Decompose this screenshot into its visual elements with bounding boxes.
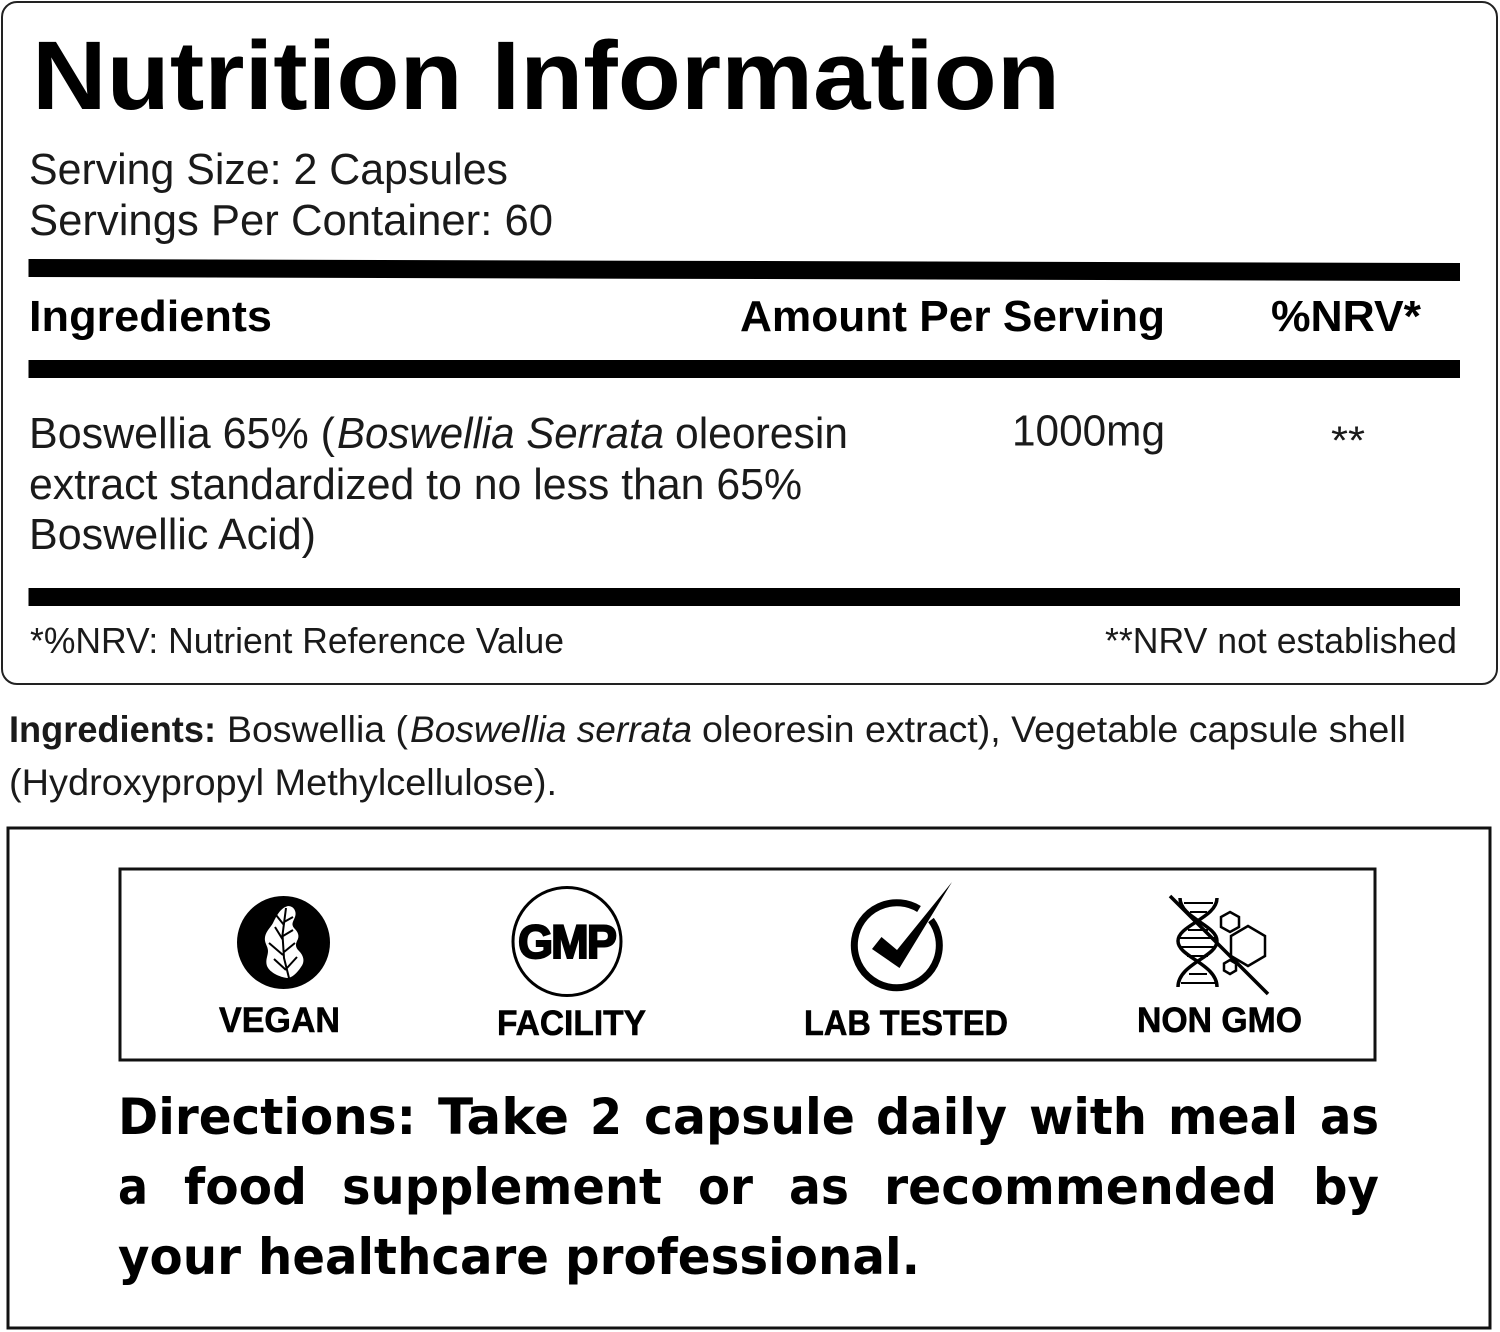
ingredients list: Boswellia ( [227,709,409,750]
ingredients list [9,709,1406,803]
table header: Amount Per Serving [740,292,1165,341]
non gmo label: NON GMO [1137,1001,1302,1040]
directions: capsule [644,1088,855,1146]
directions: as [1320,1088,1379,1146]
table top rule [28,259,1460,281]
ingredients list: (Hydroxypropyl Methylcellulose). [9,762,557,803]
table header: Ingredients [29,292,272,341]
serving information: Servings Per Container: 60 [29,196,553,245]
amount per serving value: 1000mg [1012,406,1165,456]
directions: supplement [342,1158,662,1216]
serving information: Serving Size: 2 Capsules [29,145,508,194]
ingredient description: oleoresin [675,409,848,458]
directions: professional. [565,1228,920,1286]
directions: recommended [884,1158,1277,1216]
directions: healthcare [258,1228,549,1286]
facility label: FACILITY [497,1004,646,1043]
ingredient description: Boswellia Serrata [337,409,664,458]
directions: by [1313,1158,1379,1216]
ingredient description [29,409,848,559]
directions: meal [1168,1088,1298,1146]
icon: gmp badge: GMP [518,915,616,968]
directions: daily [876,1088,1007,1146]
directions: food [184,1158,307,1216]
serving information [29,145,553,245]
table header [29,292,1422,341]
panel: certifications and directions [8,828,1490,1328]
ingredient description: extract standardized to no less than 65% [29,460,802,509]
icon: non gmo dna [1170,896,1268,994]
directions: Directions: [118,1088,416,1146]
ingredient description: Boswellic Acid) [29,510,316,559]
header rule [28,360,1460,378]
ingredients list: oleoresin extract), Vegetable capsule shell [702,709,1406,750]
directions: your [118,1228,241,1286]
directions: Take [438,1088,569,1146]
ingredient description: Boswellia 65% ( [29,409,335,458]
directions: or [698,1158,753,1216]
ingredients list: Ingredients: [9,709,216,750]
footnote: nrv not established: **NRV not established [1105,620,1457,661]
directions: a [118,1158,148,1216]
icon: vegan leaf [237,896,330,989]
ingredients list: Boswellia serrata [410,709,692,750]
directions: 2 [590,1088,622,1146]
panel: certification badges [120,869,1375,1060]
vegan label: VEGAN [219,1001,340,1040]
directions: as [789,1158,849,1216]
icon: gmp badge [513,888,621,996]
title: Nutrition Information [32,21,1060,130]
directions [118,1088,1379,1286]
icon: lab tested check [854,882,952,988]
panel: nutrition information [2,2,1497,684]
lab tested label: LAB TESTED [804,1004,1008,1043]
bottom rule [28,588,1460,606]
footnote: nrv definition: *%NRV: Nutrient Reference Value [30,620,564,661]
directions: with [1029,1088,1147,1146]
table header: %NRV* [1271,292,1422,341]
nrv value: ** [1331,419,1365,463]
